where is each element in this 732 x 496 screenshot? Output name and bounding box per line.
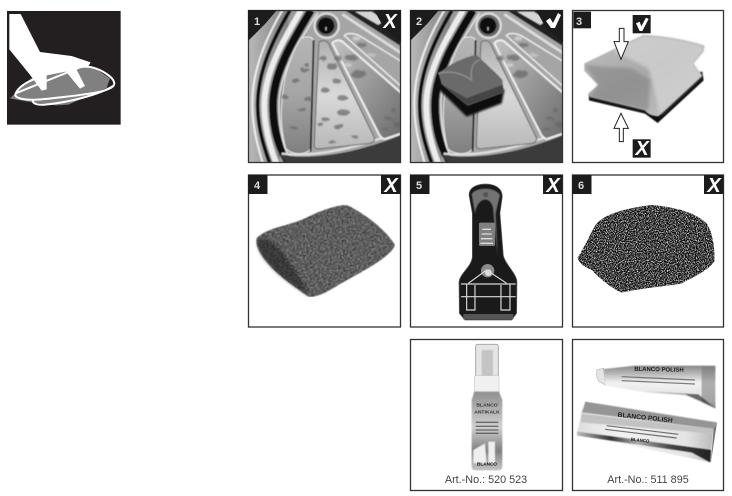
panel 6: steel coil scourer [572, 175, 724, 327]
number 6: 6 [578, 180, 584, 192]
panel 2: sink with microfibre cloth [411, 11, 562, 162]
cross mark: X [383, 175, 399, 197]
panel 2 frame and badges [410, 10, 563, 162]
water stains [282, 56, 358, 143]
arrow up [614, 113, 628, 142]
number 1: 1 [254, 16, 260, 28]
cloth [439, 83, 506, 118]
cross mark: X [634, 138, 650, 160]
polish tube and box: BLANCO POLISH [617, 412, 673, 425]
spray bottle: BLANCO [477, 462, 497, 467]
cross mark: X [545, 175, 561, 197]
panel 1: sink with water stains [249, 11, 400, 162]
steel wool [256, 205, 395, 297]
panel 5: glass scraper [410, 175, 562, 327]
cross mark: X [382, 11, 398, 33]
number 3: 3 [576, 16, 582, 28]
spray bottle: BLANCO [476, 403, 498, 409]
panel: BLANCO ANTIKALK product [410, 340, 562, 490]
scraper [459, 184, 517, 320]
scourer [578, 205, 714, 293]
polish tube and box: BLANCO POLISH [634, 367, 684, 374]
cross badge [633, 139, 651, 158]
number 4: 4 [254, 180, 261, 192]
check mark [546, 13, 561, 28]
check badge [633, 15, 651, 33]
number 2: 2 [416, 16, 422, 28]
arrow down [614, 28, 628, 59]
sponge body [589, 72, 704, 123]
polish tube and box: BLANCO [631, 437, 650, 444]
spray bottle [472, 344, 502, 470]
polish tube and box [577, 366, 717, 462]
article number: Art.-No.: 520 523 [445, 474, 527, 486]
icon: hand wiping with cloth [7, 11, 121, 125]
article number: Art.-No.: 511 895 [607, 474, 689, 486]
number 5: 5 [416, 180, 422, 192]
panel: BLANCO POLISH product [572, 340, 724, 490]
panel 3: sponge [572, 10, 724, 162]
cross mark: X [706, 175, 722, 197]
panel 4: steel wool pad [248, 175, 400, 327]
spray bottle: ANTIKALK [474, 409, 500, 415]
panel 1 frame and badges [248, 10, 401, 162]
